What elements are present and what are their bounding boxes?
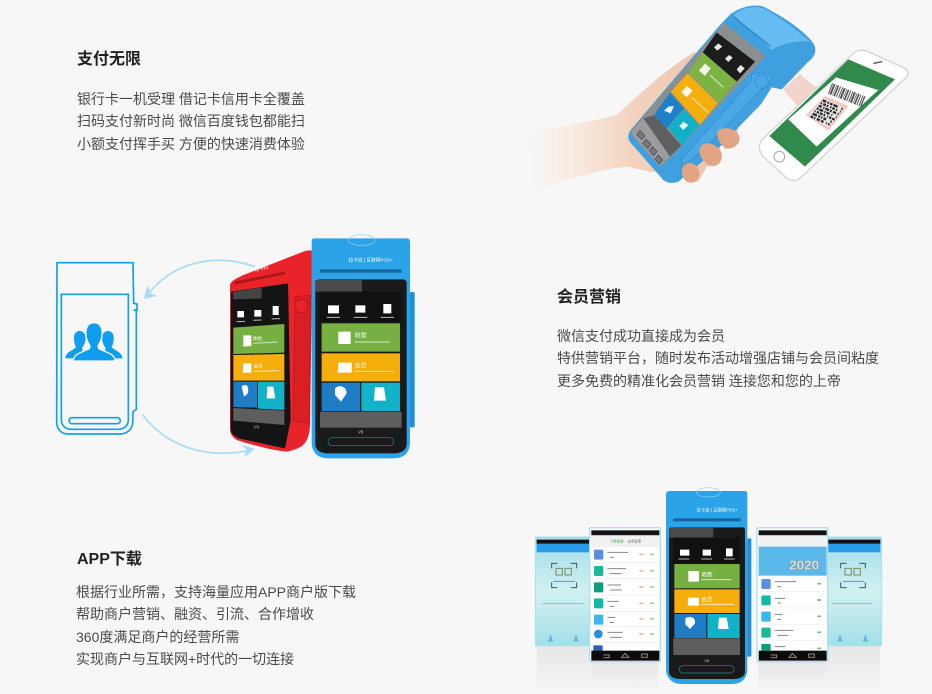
row buttons	[817, 584, 821, 648]
body	[666, 491, 747, 684]
device mark	[556, 568, 571, 575]
reflections	[537, 646, 880, 694]
paper slot	[733, 17, 771, 47]
yellow tile	[674, 589, 740, 613]
screen icons row	[320, 292, 402, 322]
arrow: top curve	[144, 260, 255, 299]
grey dock	[673, 638, 740, 655]
info band	[537, 600, 592, 607]
text block: membership	[557, 328, 879, 389]
text block: app download: 帮助商户营销、融资、引流、合作增收	[76, 606, 314, 622]
icon row	[680, 548, 733, 556]
brand text: 拉卡拉 | 互联网POS+	[349, 256, 393, 263]
text block: payment	[77, 91, 305, 152]
grey dock	[233, 408, 284, 425]
grey top strip	[233, 287, 262, 299]
text block: payment: 小额支付挥手买 方便的快速消费体验	[77, 136, 305, 152]
blue tile	[233, 382, 257, 408]
screen top icons	[703, 32, 755, 82]
tile sub-lines	[237, 319, 280, 371]
blue tile	[674, 614, 706, 638]
cyan tile	[707, 614, 740, 638]
row buttons	[639, 554, 643, 634]
text block: payment: 银行卡一机受理 借记卡信用卡全覆盖	[77, 91, 305, 107]
far-right scan screen	[823, 537, 882, 646]
grey top strip	[315, 280, 362, 292]
row dividers	[593, 562, 657, 642]
white tile icons	[664, 43, 745, 130]
side button	[295, 299, 308, 313]
status bar	[759, 530, 827, 535]
heading: payment: 支付无限	[77, 51, 141, 68]
right app list phone	[757, 528, 828, 662]
tile text lines	[692, 75, 723, 113]
status bar	[825, 540, 880, 544]
illustration: app downloads	[535, 488, 882, 694]
black face	[669, 527, 745, 679]
nav pill	[679, 666, 734, 673]
tab bar	[759, 535, 827, 547]
tile sub-lines	[679, 559, 735, 604]
tile sub-lines	[327, 317, 394, 371]
side grip	[681, 73, 771, 165]
tab label: 应用管理	[628, 539, 642, 544]
green tile	[322, 323, 400, 352]
smartphone	[759, 50, 908, 180]
text block: app download: 360度满足商户的经营所需	[76, 629, 239, 645]
tile: green	[688, 52, 737, 103]
model name: V8	[358, 429, 364, 434]
QR code	[809, 99, 844, 127]
phone screen	[769, 59, 895, 167]
paper slot	[234, 272, 285, 285]
paper slot	[673, 518, 741, 521]
yellow tile	[233, 354, 284, 381]
text block: app download: 实现商户与互联网+时代的一切连接	[76, 651, 294, 667]
grey face	[631, 23, 766, 167]
label: 收款	[355, 332, 367, 340]
barcode	[830, 88, 863, 102]
brand text: 拉卡拉 | 互联网POS+	[697, 507, 738, 514]
paper slot	[320, 269, 402, 273]
lower grey bezel	[632, 118, 670, 166]
white ticket	[788, 77, 878, 147]
blue caption line	[543, 581, 583, 604]
green tile	[233, 324, 284, 354]
model name: V8	[704, 658, 710, 663]
text block: membership: 微信支付成功直接成为会员	[557, 328, 725, 344]
heading: app download: APP下载	[77, 551, 142, 568]
outline terminal icon	[57, 263, 137, 434]
label: 会员	[701, 595, 713, 603]
QR modules	[811, 100, 843, 125]
grey dock	[643, 115, 681, 157]
POS terminal, angled	[628, 5, 815, 183]
label: 会员	[253, 362, 263, 369]
left app list phone	[590, 528, 660, 662]
green tile	[674, 564, 740, 588]
inner screen outline	[61, 294, 128, 429]
label: 会员	[355, 361, 367, 369]
text block: app download	[76, 584, 356, 667]
panel	[535, 537, 594, 646]
model name: V8	[254, 425, 260, 430]
cyan tile	[258, 382, 284, 410]
status bar	[591, 530, 659, 535]
tile icons	[335, 332, 386, 402]
side rail	[747, 538, 751, 657]
app rows text lines	[775, 582, 796, 647]
heading: membership: 会员营销	[557, 289, 621, 306]
icon: people group	[65, 323, 122, 361]
blue body	[312, 238, 410, 458]
grey dock	[320, 412, 402, 428]
far-left scan screen	[535, 537, 594, 646]
nav pill	[328, 438, 394, 446]
fingers	[682, 128, 739, 183]
red terminal	[230, 250, 313, 452]
terminal body	[628, 5, 815, 183]
device mark	[845, 568, 860, 575]
app icons	[761, 579, 771, 651]
status bar	[537, 540, 592, 544]
label: 收款	[701, 570, 713, 578]
scanner beam	[783, 74, 818, 110]
keypad buttons	[637, 131, 663, 164]
speaker	[874, 62, 882, 63]
illustration: member marketing	[57, 235, 415, 458]
app icons	[593, 550, 603, 651]
tile: cyan	[668, 109, 699, 145]
outer outline	[57, 263, 137, 434]
tab label: 下载管理	[610, 539, 624, 544]
side rail	[410, 292, 415, 427]
info band	[825, 600, 880, 607]
scan frame	[841, 563, 865, 588]
banner number: 2020	[789, 558, 819, 573]
bottom icons	[548, 634, 579, 642]
black face	[315, 279, 407, 453]
hand	[527, 52, 760, 190]
home button	[774, 151, 785, 162]
tab bar	[591, 535, 659, 547]
row buttons	[650, 554, 654, 634]
nav icons	[603, 653, 647, 658]
QR background	[806, 96, 848, 131]
tile icons	[237, 306, 279, 398]
panel	[757, 528, 828, 662]
screen top	[673, 538, 740, 564]
text block: payment: 扫码支付新时尚 微信百度钱包都能扫	[77, 113, 305, 129]
tile: blue	[654, 93, 684, 129]
blue tile	[322, 383, 360, 411]
header bar	[825, 544, 880, 552]
side button	[755, 75, 768, 88]
text block: membership: 特供营销平台，随时发布活动增强店铺与会员间粘度	[557, 350, 879, 366]
center blue terminal	[666, 488, 751, 684]
cyan tile	[361, 383, 400, 411]
panel	[823, 537, 882, 646]
bottom icons	[837, 634, 868, 642]
panel	[590, 528, 660, 662]
red body	[230, 250, 313, 452]
brand text: 拉卡拉	[254, 263, 269, 274]
arrow: bottom curve	[142, 414, 255, 457]
app rows text lines	[607, 552, 628, 637]
icon row	[328, 304, 391, 313]
blue terminal	[312, 235, 415, 458]
illustration: hand holding POS scanning a phone	[527, 5, 908, 190]
NFC mark	[696, 488, 720, 497]
nav icons	[771, 653, 814, 658]
text block: membership: 更多免费的精准化会员营销 连接您和您的上帝	[557, 373, 841, 389]
NFC mark	[348, 235, 375, 245]
banner	[759, 547, 827, 576]
red side grip	[293, 295, 311, 424]
text block: app download: 根据行业所需，支持海量应用APP商户版下载	[76, 584, 356, 600]
blue caption line	[832, 581, 873, 604]
phone body	[759, 50, 908, 180]
scan frame	[552, 563, 577, 588]
yellow tile	[322, 353, 400, 381]
navigation bar	[759, 651, 827, 661]
black face	[231, 283, 291, 448]
tile: yellow	[671, 73, 718, 125]
navigation bar	[591, 651, 659, 661]
tile icons	[685, 571, 729, 629]
header bar	[537, 544, 592, 552]
pill slot	[69, 418, 120, 424]
grey top strip	[669, 528, 713, 538]
label: 收款	[253, 335, 262, 342]
row dividers	[761, 592, 825, 640]
printer roll highlight	[733, 7, 810, 50]
